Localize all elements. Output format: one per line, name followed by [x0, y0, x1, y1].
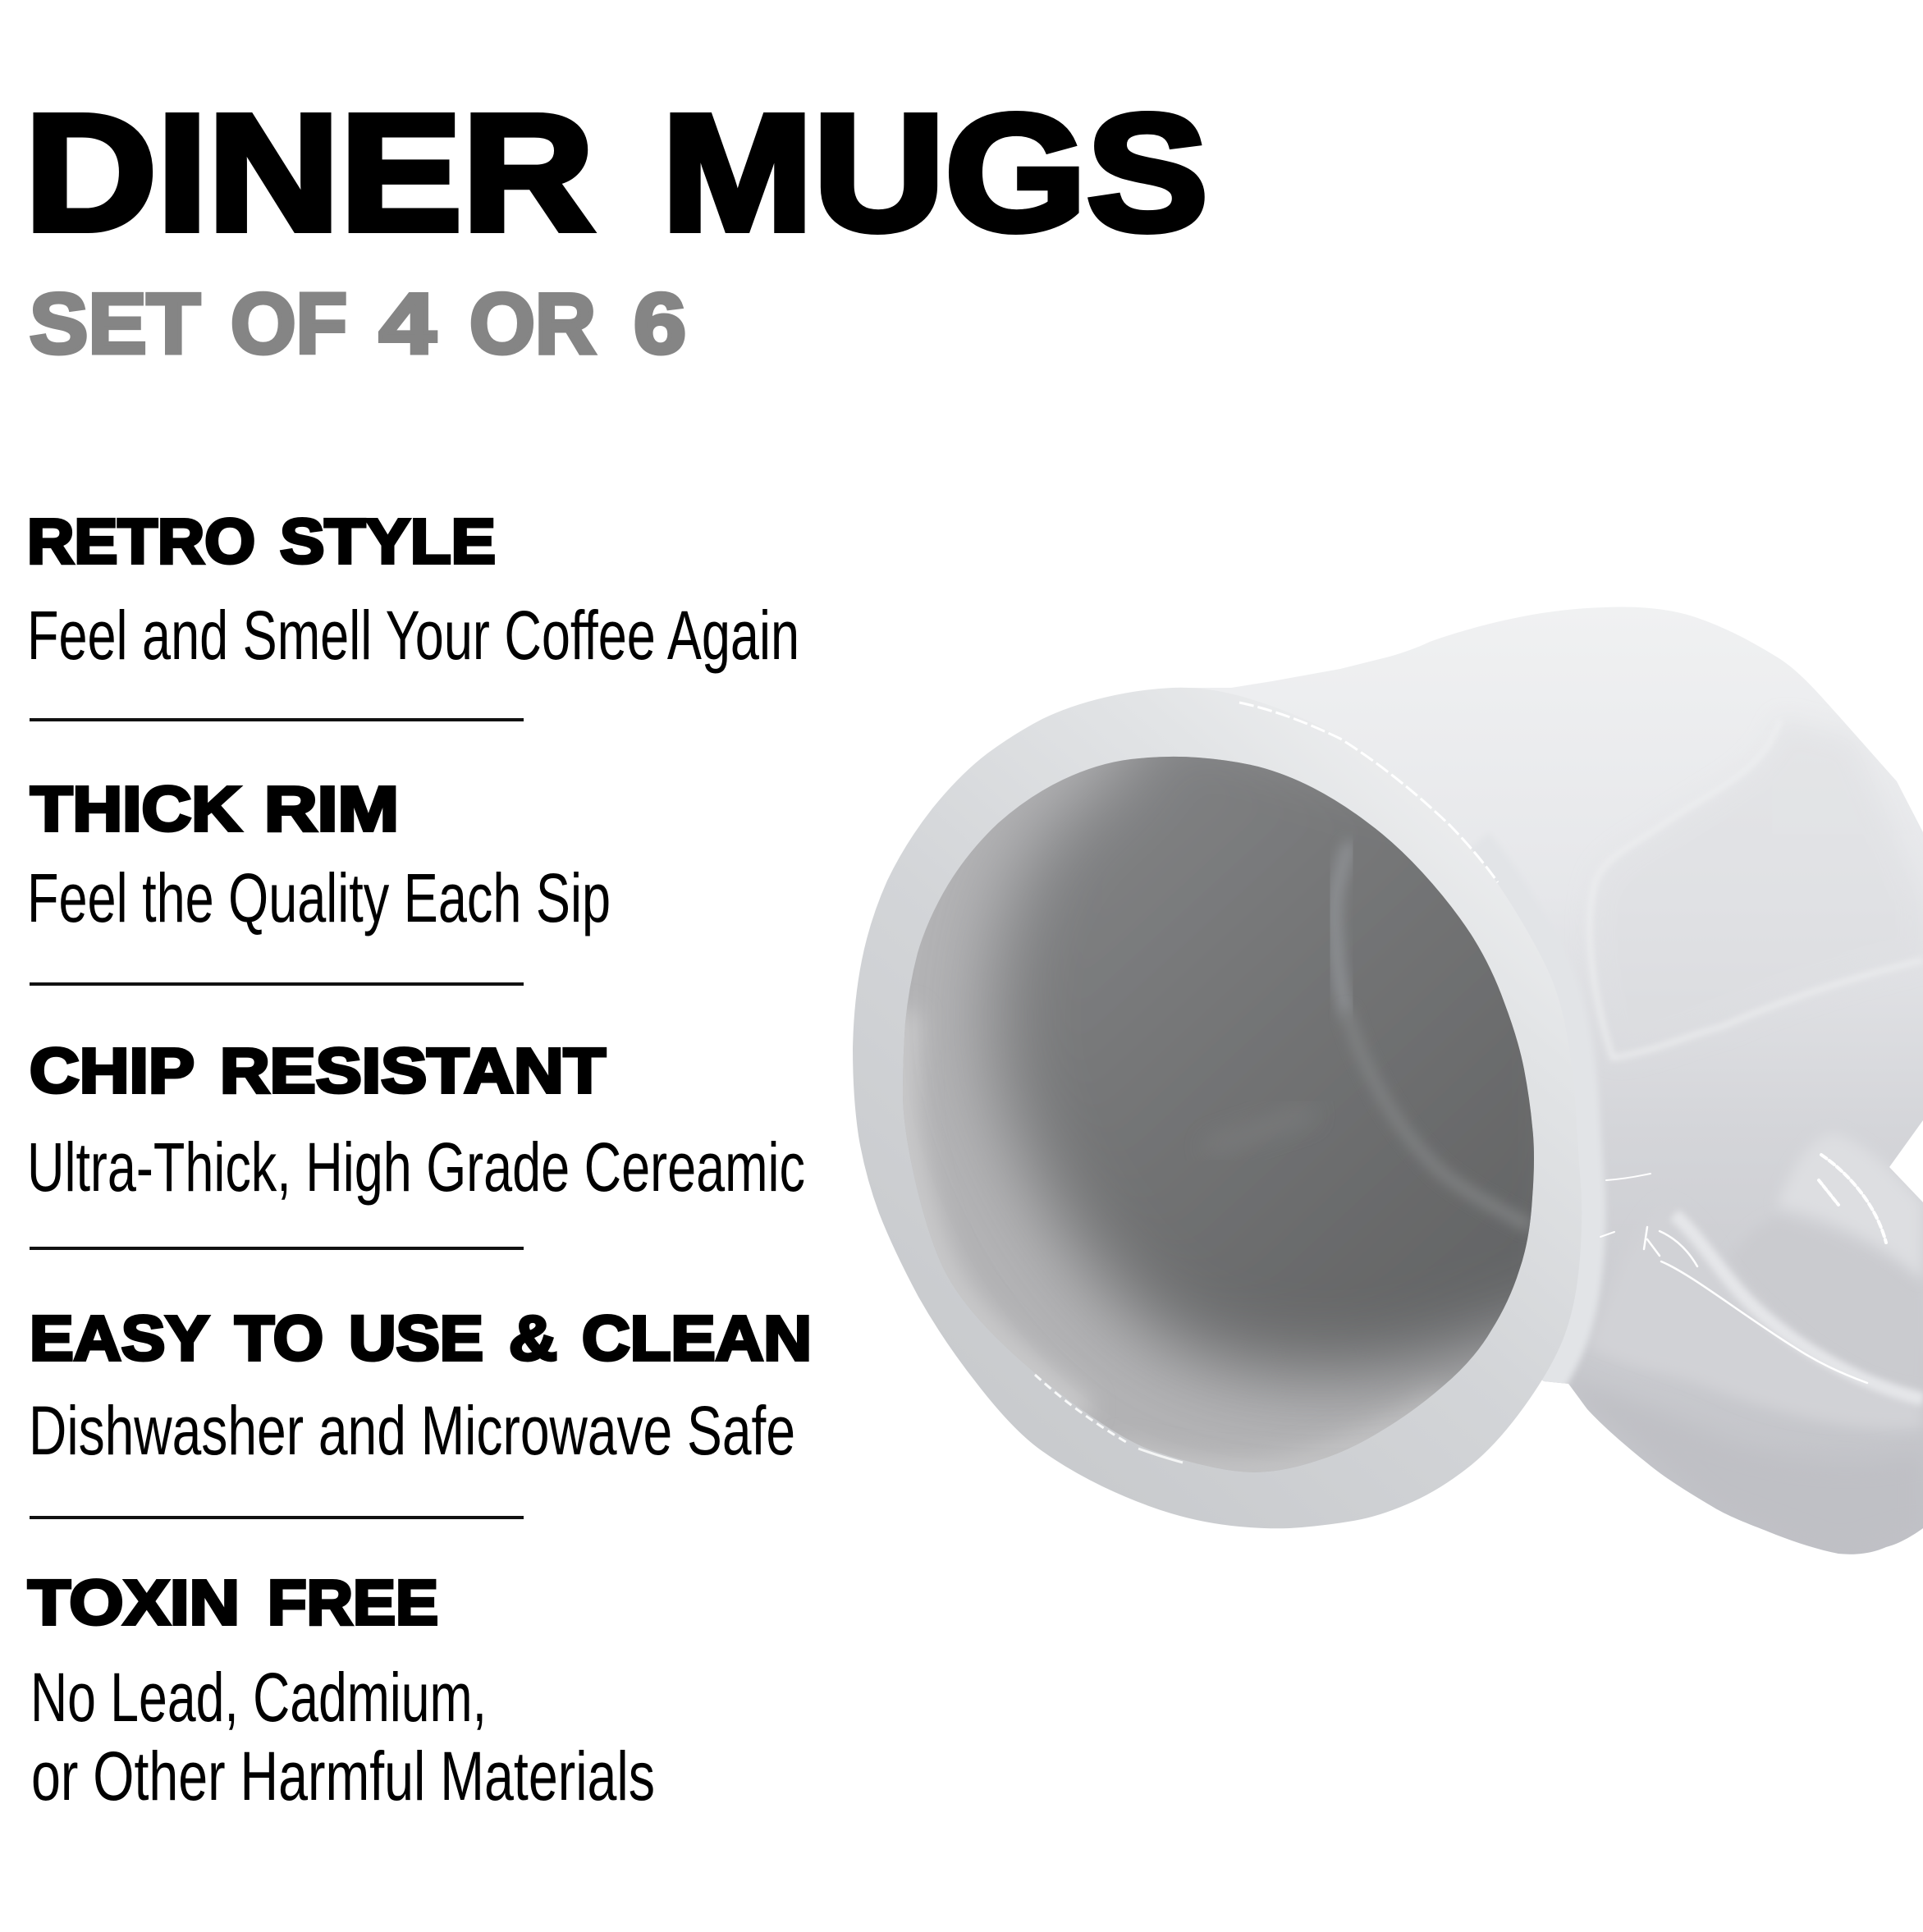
- text: toxin free description: [30, 1659, 655, 1815]
- heading: thick rim: [30, 774, 399, 845]
- heading: thick rim: RIM: [264, 774, 399, 845]
- subtitle: OR: [469, 277, 596, 372]
- subtitle: [30, 277, 686, 372]
- feature: chip resistant: [27, 1036, 805, 1206]
- heading: chip resistant: [30, 1036, 606, 1106]
- heading: easy to use and clean: &: [509, 1303, 557, 1374]
- feature: easy to use and clean: [29, 1303, 812, 1469]
- heading: thick rim: THICK: [30, 774, 241, 845]
- heading: easy to use and clean: EASY: [30, 1303, 209, 1374]
- text: chip resistant description: Ultra-Thick, High Grade Cereamic: [27, 1129, 805, 1206]
- text: retro style description: Feel and Smell Your Coffee Again: [27, 597, 799, 674]
- mug rim: [853, 688, 1582, 1528]
- subtitle: SET: [30, 277, 200, 372]
- title: DINER: [25, 80, 594, 265]
- heading: easy to use and clean: [30, 1303, 812, 1374]
- heading: toxin free: [28, 1568, 438, 1638]
- interior floor highlight: [1335, 848, 1348, 1009]
- heading: chip resistant: RESISTANT: [220, 1036, 606, 1106]
- subtitle: OF: [231, 277, 347, 372]
- heading: toxin free: TOXIN: [28, 1568, 240, 1638]
- feature: thick rim: [27, 774, 611, 936]
- title: [25, 80, 1208, 265]
- handle hole: [1729, 1218, 1923, 1394]
- heading: toxin free: FREE: [268, 1568, 438, 1638]
- heading: easy to use and clean: CLEAN: [582, 1303, 812, 1374]
- text: easy to use description: Dishwasher and Microwave Safe: [29, 1392, 795, 1469]
- heading: chip resistant: CHIP: [30, 1036, 195, 1106]
- mug illustration: [853, 607, 1923, 1554]
- subtitle: 6: [634, 277, 686, 372]
- heading: easy to use and clean: TO: [235, 1303, 323, 1374]
- lower handle prong: [1605, 1336, 1919, 1426]
- mug body and handle: [1182, 607, 1923, 1554]
- subtitle: 4: [379, 277, 436, 372]
- rim shoulder: [1542, 1027, 1606, 1384]
- heading: retro style: RETRO: [27, 506, 255, 577]
- handle glaze highlights: [1600, 1155, 1886, 1383]
- upper handle prong: [1783, 1141, 1922, 1271]
- feature: toxin free: [28, 1568, 655, 1815]
- text: toxin free description: No Lead, Cadmium,: [30, 1659, 487, 1736]
- heading: retro style: [27, 506, 496, 577]
- feature: retro style: [27, 506, 799, 674]
- mug interior: [903, 757, 1534, 1472]
- text: thick rim description: Feel the Quality Each Sip: [27, 859, 611, 936]
- text: toxin free description: or Other Harmful Materials: [31, 1737, 655, 1815]
- heading: easy to use and clean: USE: [349, 1303, 483, 1374]
- title: MUGS: [662, 80, 1208, 265]
- heading: retro style: STYLE: [280, 506, 496, 577]
